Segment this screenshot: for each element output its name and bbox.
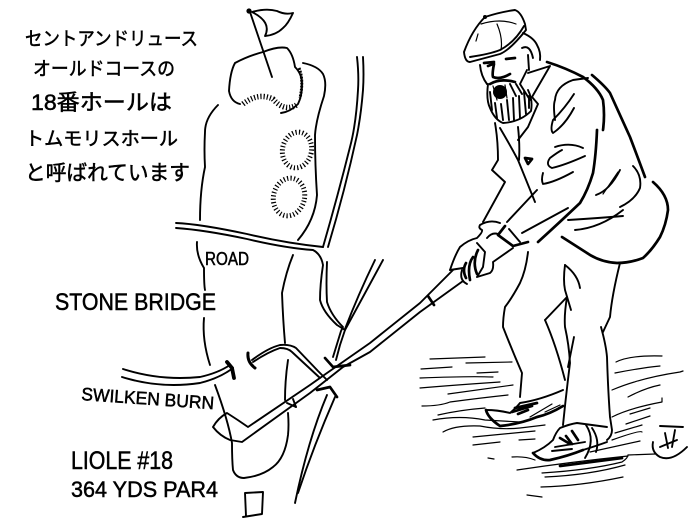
illustration: golf club xyxy=(213,270,463,442)
shoe: left xyxy=(486,390,563,426)
heading: Japanese handwritten caption: と呼ばれています xyxy=(25,162,190,185)
label: stone bridge: STONE BRIDGE xyxy=(55,289,216,316)
label: swilken burn: SWILKEN BURN xyxy=(81,384,215,413)
jacket torso xyxy=(483,62,645,242)
icon: artist signature xyxy=(653,426,687,458)
face and hair xyxy=(480,33,540,100)
hands and cuff xyxy=(450,221,528,284)
shoe: right xyxy=(533,423,607,460)
bunker: lower xyxy=(269,175,309,219)
legs xyxy=(503,252,620,440)
illustration: golfer Old Tom Morris xyxy=(450,10,668,460)
label: distance and par: 364 YDS PAR4 xyxy=(71,477,218,502)
road: double lines xyxy=(176,57,383,503)
heading: Japanese handwritten caption: オールドコースの xyxy=(33,59,175,80)
label: road: ROAD xyxy=(205,249,249,269)
flat cap xyxy=(464,10,526,62)
label: hole number: LIOLE #18 xyxy=(71,447,173,475)
beard xyxy=(487,80,532,123)
stone bridge railings xyxy=(317,358,350,397)
swilken burn: water channel xyxy=(122,345,327,385)
green xyxy=(229,48,302,113)
fairway outline xyxy=(197,63,325,478)
jacket collar xyxy=(518,66,550,140)
heading: Japanese handwritten caption: 18番ホールは xyxy=(31,90,172,115)
map: hole 18 course plan xyxy=(122,8,383,517)
tee box xyxy=(243,492,263,517)
bunker: upper xyxy=(279,129,315,171)
ground: grass strokes xyxy=(420,356,683,497)
hip xyxy=(562,182,668,263)
icon: flag on pin xyxy=(246,8,293,77)
heading: Japanese handwritten caption xyxy=(25,29,198,185)
heading: Japanese handwritten caption: トムモリスホール xyxy=(25,129,178,150)
heading: Japanese handwritten caption: セントアンドリュース xyxy=(25,29,198,50)
